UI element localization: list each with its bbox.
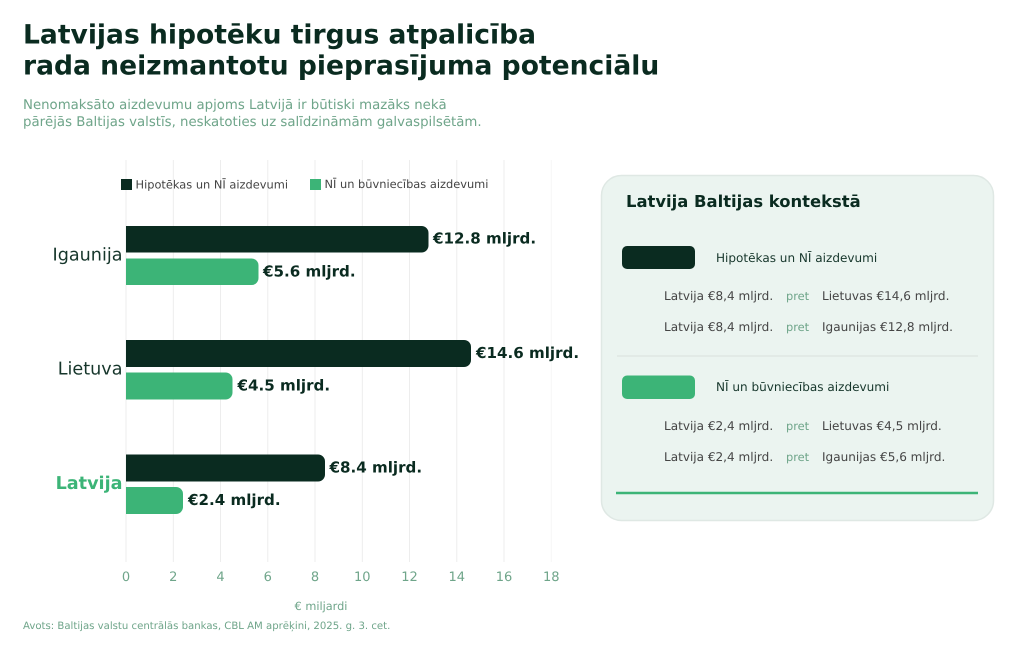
section: mortgages: Latvija €8,4 mljrd. (664, 320, 773, 334)
subtitle: Nenomaksāto aizdevumu apjoms Latvijā ir būtiski mazāks nekā (23, 98, 447, 113)
x axis: 6 (264, 570, 272, 585)
legend: Hipotēkas un NĪ aizdevumi (136, 178, 288, 192)
section: mortgages: pret (786, 320, 810, 334)
x axis: 14 (449, 570, 465, 585)
section: construction (622, 376, 945, 464)
section: mortgages (622, 246, 953, 334)
section: mortgages: Lietuvas €14,6 mljrd. (822, 289, 949, 303)
section: construction: Igaunijas €5,6 mljrd. (822, 450, 945, 464)
section: mortgages: Igaunijas €12,8 mljrd. (822, 320, 953, 334)
section: mortgages: Hipotēkas un NĪ aizdevumi (716, 251, 877, 265)
source note: Avots: Baltijas valstu centrālās bankas, CBL AM aprēķini, 2025. g. 3. cet. (23, 621, 390, 632)
bars: Lietuva: €4.5 mljrd. (236, 376, 330, 394)
title: Latvijas hipotēku tirgus atpalicība (23, 20, 536, 50)
x axis: 16 (496, 570, 512, 585)
country labels: Lietuva (58, 360, 122, 380)
title (23, 20, 659, 82)
subtitle (23, 98, 482, 130)
section: mortgages: pret (786, 289, 810, 303)
country labels (52, 246, 122, 494)
section: construction: Lietuvas €4,5 mljrd. (822, 419, 942, 433)
section: construction: Latvija €2,4 mljrd. (664, 450, 773, 464)
bars: Igaunija: €12.8 mljrd. (432, 230, 536, 248)
title: rada neizmantotu pieprasījuma potenciālu (23, 50, 659, 82)
x axis: 2 (169, 570, 177, 585)
section: construction: pret (786, 419, 810, 433)
x axis: 18 (543, 570, 560, 585)
legend (121, 177, 488, 192)
country labels: Igaunija (52, 246, 122, 266)
bars: Lietuva: €14.6 mljrd. (475, 344, 579, 362)
x axis: 0 (122, 570, 130, 585)
section: construction: pret (786, 450, 810, 464)
bars: Igaunija: €5.6 mljrd. (262, 262, 356, 280)
legend: NĪ un būvniecības aizdevumi (324, 177, 488, 191)
x axis (122, 570, 560, 613)
panel heading: Latvija Baltijas kontekstā (626, 192, 861, 211)
panel: Latvija Baltijas kontekstā (602, 176, 994, 520)
bars: Latvija (126, 454, 422, 514)
section: construction: Latvija €2,4 mljrd. (664, 419, 773, 433)
bar chart (52, 160, 579, 613)
x axis: 8 (311, 570, 319, 585)
bars: Latvija: €8.4 mljrd. (328, 458, 422, 476)
x axis: € miljardi (295, 600, 347, 613)
section: mortgages: Latvija €8,4 mljrd. (664, 289, 773, 303)
bars: Latvija: €2.4 mljrd. (187, 491, 281, 509)
x axis: 12 (401, 570, 418, 585)
x axis: 10 (354, 570, 371, 585)
section: construction: NĪ un būvniecības aizdevumi (716, 380, 889, 394)
x axis: 4 (216, 570, 225, 585)
country labels: Latvija (56, 474, 122, 494)
bars: Igaunija (126, 226, 536, 285)
bars: Lietuva (126, 340, 579, 400)
subtitle: pārējās Baltijas valstīs, neskatoties uz salīdzināmām galvaspilsētām. (23, 115, 482, 130)
